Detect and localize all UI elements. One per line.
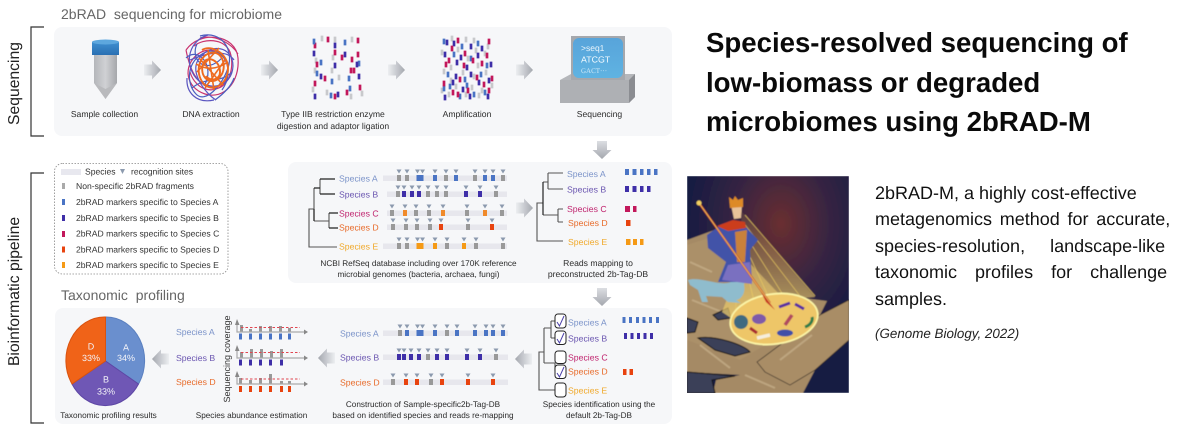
staff xyxy=(699,203,770,303)
species labels: Species C xyxy=(339,208,379,218)
title: microbiomes using 2bRAD-M xyxy=(706,106,1091,137)
title: Species-resolved sequencing of xyxy=(706,27,1129,58)
arrow xyxy=(515,350,532,368)
tree: reference species xyxy=(309,179,338,247)
species labels: abundance xyxy=(176,327,216,387)
species labels: mapped: Species B xyxy=(567,184,606,194)
arrow xyxy=(516,198,533,218)
king robe xyxy=(707,224,758,282)
heading: 2bRAD sequencing for microbiome: 2bRAD sequencing for microbiome xyxy=(61,6,282,22)
pie chart: 33% xyxy=(82,353,100,363)
species labels: sample-specific: Species B xyxy=(340,352,379,362)
water pools xyxy=(687,308,750,393)
identified markers xyxy=(622,317,659,375)
species labels: Species B xyxy=(339,190,378,200)
title: low-biomass or degraded xyxy=(706,67,1040,98)
axis label: Sequencing coverage xyxy=(222,315,232,403)
description text: samples. xyxy=(875,289,947,309)
icon: sample tube xyxy=(92,40,119,99)
pie chart: 33% xyxy=(97,386,115,396)
glowing microbe circle xyxy=(727,288,821,350)
arrow xyxy=(152,350,169,368)
panel: reference database and read mapping xyxy=(288,162,672,283)
legend xyxy=(54,164,228,274)
section label: Bioinformatic pipeline: Bioinformatic pipeline xyxy=(6,217,23,366)
icon: DNA tangle xyxy=(186,35,238,101)
species labels: identification xyxy=(568,318,608,396)
description text: taxonomic profiles for challenge xyxy=(875,262,1167,282)
mapped read markers xyxy=(625,169,658,245)
captions: microbial genomes (bacteria, archaea, fungi) xyxy=(337,270,500,279)
left bracket: Sequencing xyxy=(31,27,44,136)
captions: sequencing steps: Sample collection xyxy=(71,109,138,119)
section label: Sequencing: Sequencing xyxy=(6,42,23,125)
arrow: down xyxy=(592,288,612,306)
arrow: down xyxy=(592,141,612,159)
sample-specific tracks xyxy=(383,324,508,385)
arrow xyxy=(261,60,278,80)
captions: sequencing steps: digestion and adaptor ligation xyxy=(277,121,389,131)
microbes xyxy=(734,303,812,338)
citation: (Genome Biology, 2022) xyxy=(875,326,1019,341)
legend: Species xyxy=(85,166,116,176)
heading: Taxonomic profiling: Taxonomic profiling xyxy=(61,287,185,303)
captions: Species abundance estimation xyxy=(196,411,308,420)
species labels: identification: Species A xyxy=(568,318,607,328)
species labels: abundance: Species B xyxy=(176,353,215,363)
legend: 2bRAD markers specific to Species D xyxy=(76,244,219,254)
description text: species-resolution, landscape-like xyxy=(875,236,1165,256)
species labels: mapped: Species C xyxy=(567,204,607,214)
legend: Non-specific 2bRAD fragments xyxy=(76,181,194,191)
light beams xyxy=(722,212,815,322)
title xyxy=(706,27,1129,137)
illustration: king and microbes xyxy=(687,176,849,393)
tree: mapped reads xyxy=(537,173,563,241)
icon: sequencing machine: ATCGT xyxy=(581,54,611,64)
icon: sequencing machine xyxy=(560,36,635,103)
species labels: Species D xyxy=(339,222,379,232)
captions: based on identified species and reads re-mapping xyxy=(332,411,514,420)
species labels: mapped xyxy=(567,169,608,247)
coverage charts xyxy=(235,319,308,392)
species labels xyxy=(339,174,379,252)
arrow xyxy=(144,60,161,80)
description text: metagenomics method for accurate, xyxy=(875,209,1170,229)
captions: sequencing steps: DNA extraction xyxy=(182,109,240,119)
legend: 2bRAD markers specific to Species E xyxy=(76,260,219,270)
tree with check boxes xyxy=(539,314,566,397)
pie chart: 34% xyxy=(117,353,135,363)
arrow xyxy=(388,60,405,80)
pie chart: B xyxy=(103,374,109,384)
reference tracks xyxy=(383,170,507,249)
description text: 2bRAD-M, a highly cost-effective xyxy=(875,183,1137,203)
species labels: mapped: Species E xyxy=(568,237,607,247)
captions: default 2b-Tag-DB xyxy=(566,411,633,420)
captions xyxy=(320,258,648,279)
left bracket: Bioinformatic pipeline xyxy=(31,173,44,423)
species labels: abundance: Species A xyxy=(176,327,215,337)
captions: sequencing steps: Amplification xyxy=(443,109,492,119)
species labels: identification: Species E xyxy=(568,386,607,396)
captions: preconstructed 2b-Tag-DB xyxy=(548,269,648,279)
species labels: mapped: Species D xyxy=(568,218,608,228)
captions xyxy=(60,400,656,420)
legend: 2bRAD markers specific to Species C xyxy=(76,228,219,238)
legend: recognition sites xyxy=(131,166,193,176)
species labels: abundance: Species D xyxy=(176,377,216,387)
land xyxy=(687,229,849,393)
species labels: identification: Species C xyxy=(568,352,608,362)
captions: NCBI RefSeq database including over 170K reference xyxy=(320,259,517,268)
panel: sequencing workflow xyxy=(54,27,672,136)
species labels: Species E xyxy=(339,242,378,252)
captions: sequencing steps: Sequencing xyxy=(577,109,622,119)
red scarf xyxy=(717,220,746,231)
legend: 2bRAD markers specific to Species B xyxy=(76,213,219,223)
captions: Construction of Sample-specific2b-Tag-DB xyxy=(346,400,501,409)
captions: Species identification using the xyxy=(543,400,656,409)
icon: digested fragments xyxy=(312,36,363,99)
description text xyxy=(875,183,1170,309)
panel: taxonomic profiling xyxy=(55,308,672,424)
captions: sequencing steps xyxy=(71,109,622,131)
pie chart: A xyxy=(123,342,129,352)
arrow xyxy=(516,60,533,80)
icon: amplified fragments xyxy=(441,36,493,100)
species labels: identification: Species B xyxy=(568,334,607,344)
captions: sequencing steps: Type IIB restriction enzyme xyxy=(281,109,385,119)
species labels: Species A xyxy=(339,174,378,184)
species labels: identification: Species D xyxy=(568,366,608,376)
species labels: sample-specific: Species A xyxy=(340,328,379,338)
icon: sequencing machine: >seq1 xyxy=(581,43,605,53)
species labels: sample-specific xyxy=(340,328,380,388)
captions: Taxonomic profiling results xyxy=(60,411,157,420)
pie chart xyxy=(66,317,145,406)
species labels: mapped: Species A xyxy=(567,169,606,179)
legend: 2bRAD markers specific to Species A xyxy=(76,197,219,207)
arrow xyxy=(318,348,335,368)
king head and crown xyxy=(731,205,742,219)
species labels: sample-specific: Species D xyxy=(340,378,380,388)
pie chart: D xyxy=(88,342,95,352)
icon: sequencing machine: GACT··· xyxy=(581,67,607,75)
unicorn xyxy=(688,268,746,303)
captions: Reads mapping to xyxy=(563,258,633,268)
